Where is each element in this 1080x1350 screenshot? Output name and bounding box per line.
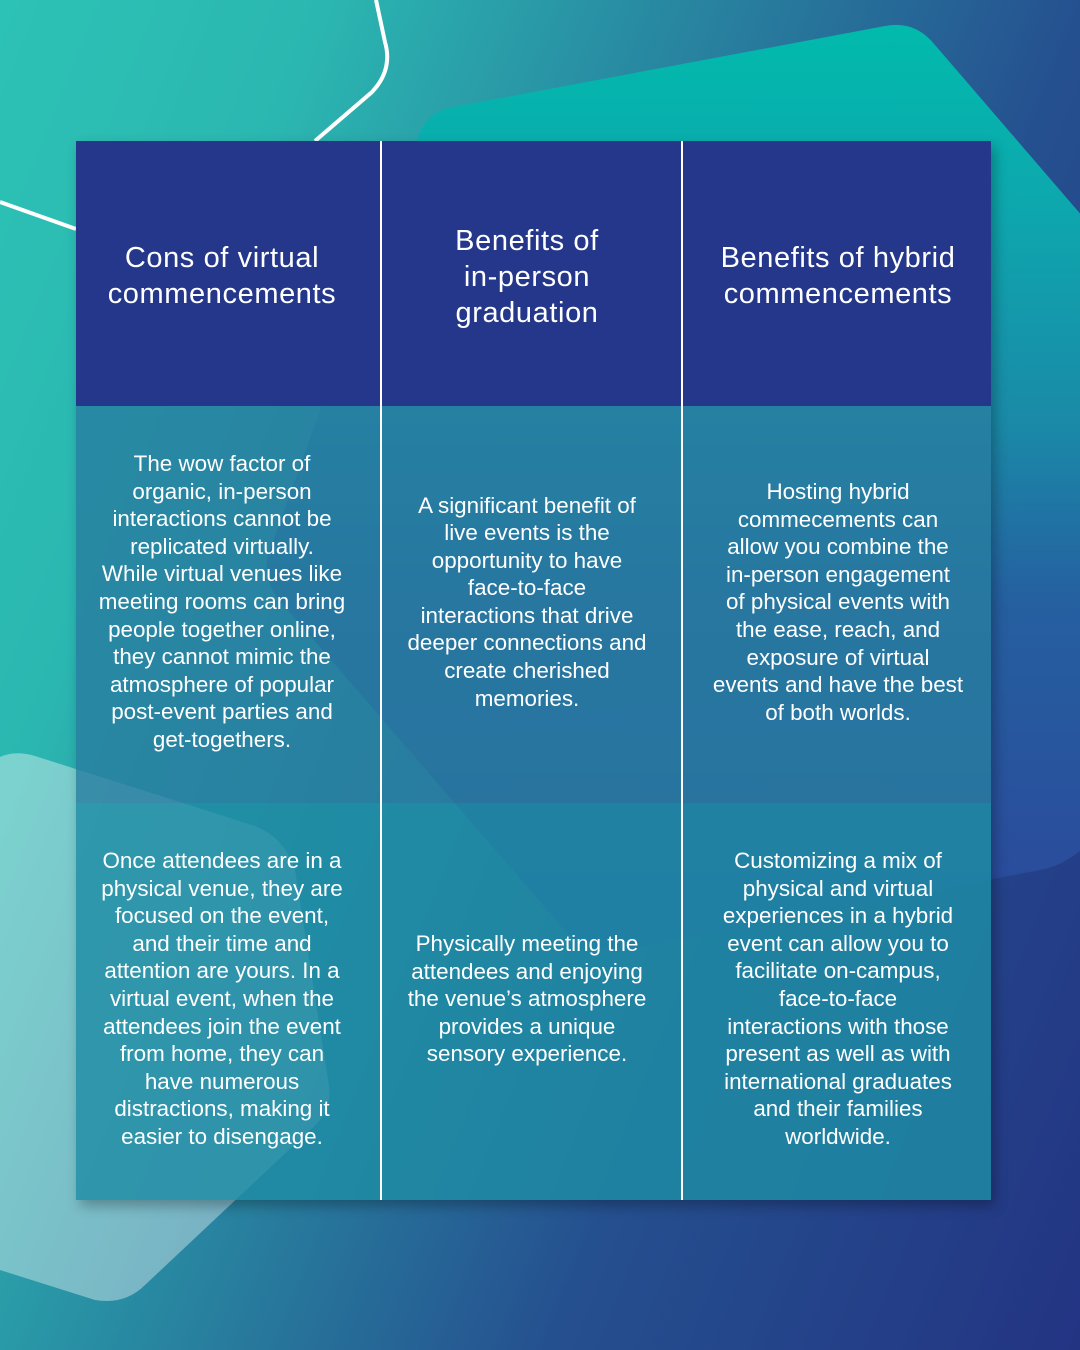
text: hybrid row 2: present as well as with bbox=[725, 1041, 951, 1066]
text: hybrid row 2: physical and virtual bbox=[743, 876, 933, 901]
text: in-person row 2: sensory experience. bbox=[427, 1041, 627, 1066]
text: hybrid row 1: Hosting hybrid bbox=[766, 479, 910, 504]
text: virtual cons row 2: and their time and bbox=[132, 931, 312, 956]
text: virtual cons row 2: virtual event, when the bbox=[110, 986, 334, 1011]
comparison table bbox=[76, 141, 991, 1200]
text: hybrid row 1: exposure of virtual bbox=[747, 645, 929, 670]
heading: benefits of in-person: Benefits of bbox=[455, 225, 599, 257]
text: virtual cons row 1: atmosphere of popular bbox=[110, 672, 334, 697]
heading: benefits of hybrid bbox=[721, 242, 955, 310]
text: hybrid row 2: Customizing a mix of bbox=[734, 848, 942, 873]
second content row bbox=[76, 803, 991, 1200]
text: virtual cons row 2: distractions, making it bbox=[114, 1096, 330, 1121]
text: hybrid row 2: international graduates bbox=[724, 1069, 952, 1094]
text: in-person row 2: attendees and enjoying bbox=[411, 959, 643, 984]
text: hybrid row 1: in-person engagement bbox=[726, 562, 950, 587]
text: hybrid row 2: face-to-face bbox=[779, 986, 897, 1011]
text: virtual cons row 2: Once attendees are in a bbox=[102, 848, 342, 873]
text: hybrid row 2: and their families bbox=[753, 1096, 923, 1121]
column divider bbox=[681, 141, 683, 1200]
text: hybrid row 2: experiences in a hybrid bbox=[723, 903, 953, 928]
text: virtual cons row 1: they cannot mimic the bbox=[113, 644, 331, 669]
text: virtual cons row 1: post-event parties and bbox=[111, 699, 333, 724]
text: virtual cons row 1: meeting rooms can bring bbox=[99, 589, 345, 614]
text: hybrid row 2: worldwide. bbox=[785, 1124, 891, 1149]
text: in-person row 1 bbox=[407, 492, 647, 711]
heading: benefits of hybrid: Benefits of hybrid bbox=[721, 242, 955, 274]
text: virtual cons row 1: people together online, bbox=[108, 617, 336, 642]
text: virtual cons row 1: The wow factor of bbox=[134, 451, 310, 476]
text: hybrid row 1: the ease, reach, and bbox=[736, 617, 940, 642]
text: virtual cons row 1 bbox=[99, 451, 345, 752]
text: in-person row 1: interactions that drive bbox=[421, 603, 633, 628]
text: hybrid row 1: commecements can bbox=[738, 507, 938, 532]
text: in-person row 2: the venue’s atmosphere bbox=[408, 986, 646, 1011]
heading: benefits of in-person: graduation bbox=[455, 297, 599, 329]
text: virtual cons row 1: get-togethers. bbox=[153, 727, 291, 752]
text: virtual cons row 2: physical venue, they are bbox=[101, 876, 343, 901]
heading: cons of virtual: Cons of virtual bbox=[125, 242, 319, 274]
text: in-person row 1: deeper connections and bbox=[407, 630, 647, 655]
text: in-person row 1: live events is the bbox=[444, 520, 610, 545]
heading: cons of virtual: commencements bbox=[108, 278, 336, 310]
text: virtual cons row 2 bbox=[101, 848, 343, 1149]
text: in-person row 2 bbox=[408, 931, 646, 1066]
text: virtual cons row 2: focused on the event, bbox=[115, 903, 329, 928]
text: hybrid row 2: event can allow you to bbox=[727, 931, 949, 956]
text: hybrid row 2: facilitate on-campus, bbox=[735, 958, 941, 983]
text: in-person row 1: A significant benefit of bbox=[418, 492, 636, 518]
text: virtual cons row 2: attention are yours. In a bbox=[104, 958, 340, 983]
text: virtual cons row 2: have numerous bbox=[145, 1069, 299, 1094]
text: in-person row 1: create cherished bbox=[444, 658, 610, 683]
column divider bbox=[380, 141, 382, 1200]
heading: benefits of hybrid: commencements bbox=[724, 278, 952, 310]
text: hybrid row 1: events and have the best bbox=[713, 672, 963, 697]
header row bbox=[76, 141, 991, 406]
text: in-person row 1: face-to-face bbox=[468, 575, 586, 600]
text: hybrid row 1: allow you combine the bbox=[727, 534, 949, 559]
text: virtual cons row 1: organic, in-person bbox=[132, 479, 312, 504]
text: hybrid row 2 bbox=[723, 848, 953, 1149]
text: virtual cons row 1: While virtual venues like bbox=[102, 561, 342, 586]
text: virtual cons row 1: interactions cannot be bbox=[112, 506, 332, 531]
text: virtual cons row 2: easier to disengage. bbox=[121, 1124, 323, 1149]
text: hybrid row 1 bbox=[713, 479, 963, 725]
text: virtual cons row 1: replicated virtually. bbox=[130, 534, 314, 559]
text: hybrid row 1: of physical events with bbox=[726, 589, 950, 614]
text: in-person row 1: memories. bbox=[475, 686, 579, 711]
heading: benefits of in-person: in-person bbox=[464, 261, 590, 293]
text: in-person row 2: Physically meeting the bbox=[416, 931, 638, 956]
text: virtual cons row 2: from home, they can bbox=[120, 1041, 324, 1066]
heading: benefits of in-person bbox=[455, 225, 599, 329]
first content row bbox=[76, 406, 991, 803]
text: in-person row 1: opportunity to have bbox=[432, 548, 622, 573]
text: virtual cons row 2: attendees join the event bbox=[103, 1014, 341, 1039]
text: in-person row 2: provides a unique bbox=[439, 1014, 615, 1039]
heading: cons of virtual bbox=[108, 242, 336, 310]
text: hybrid row 1: of both worlds. bbox=[765, 700, 911, 725]
text: hybrid row 2: interactions with those bbox=[727, 1014, 949, 1039]
